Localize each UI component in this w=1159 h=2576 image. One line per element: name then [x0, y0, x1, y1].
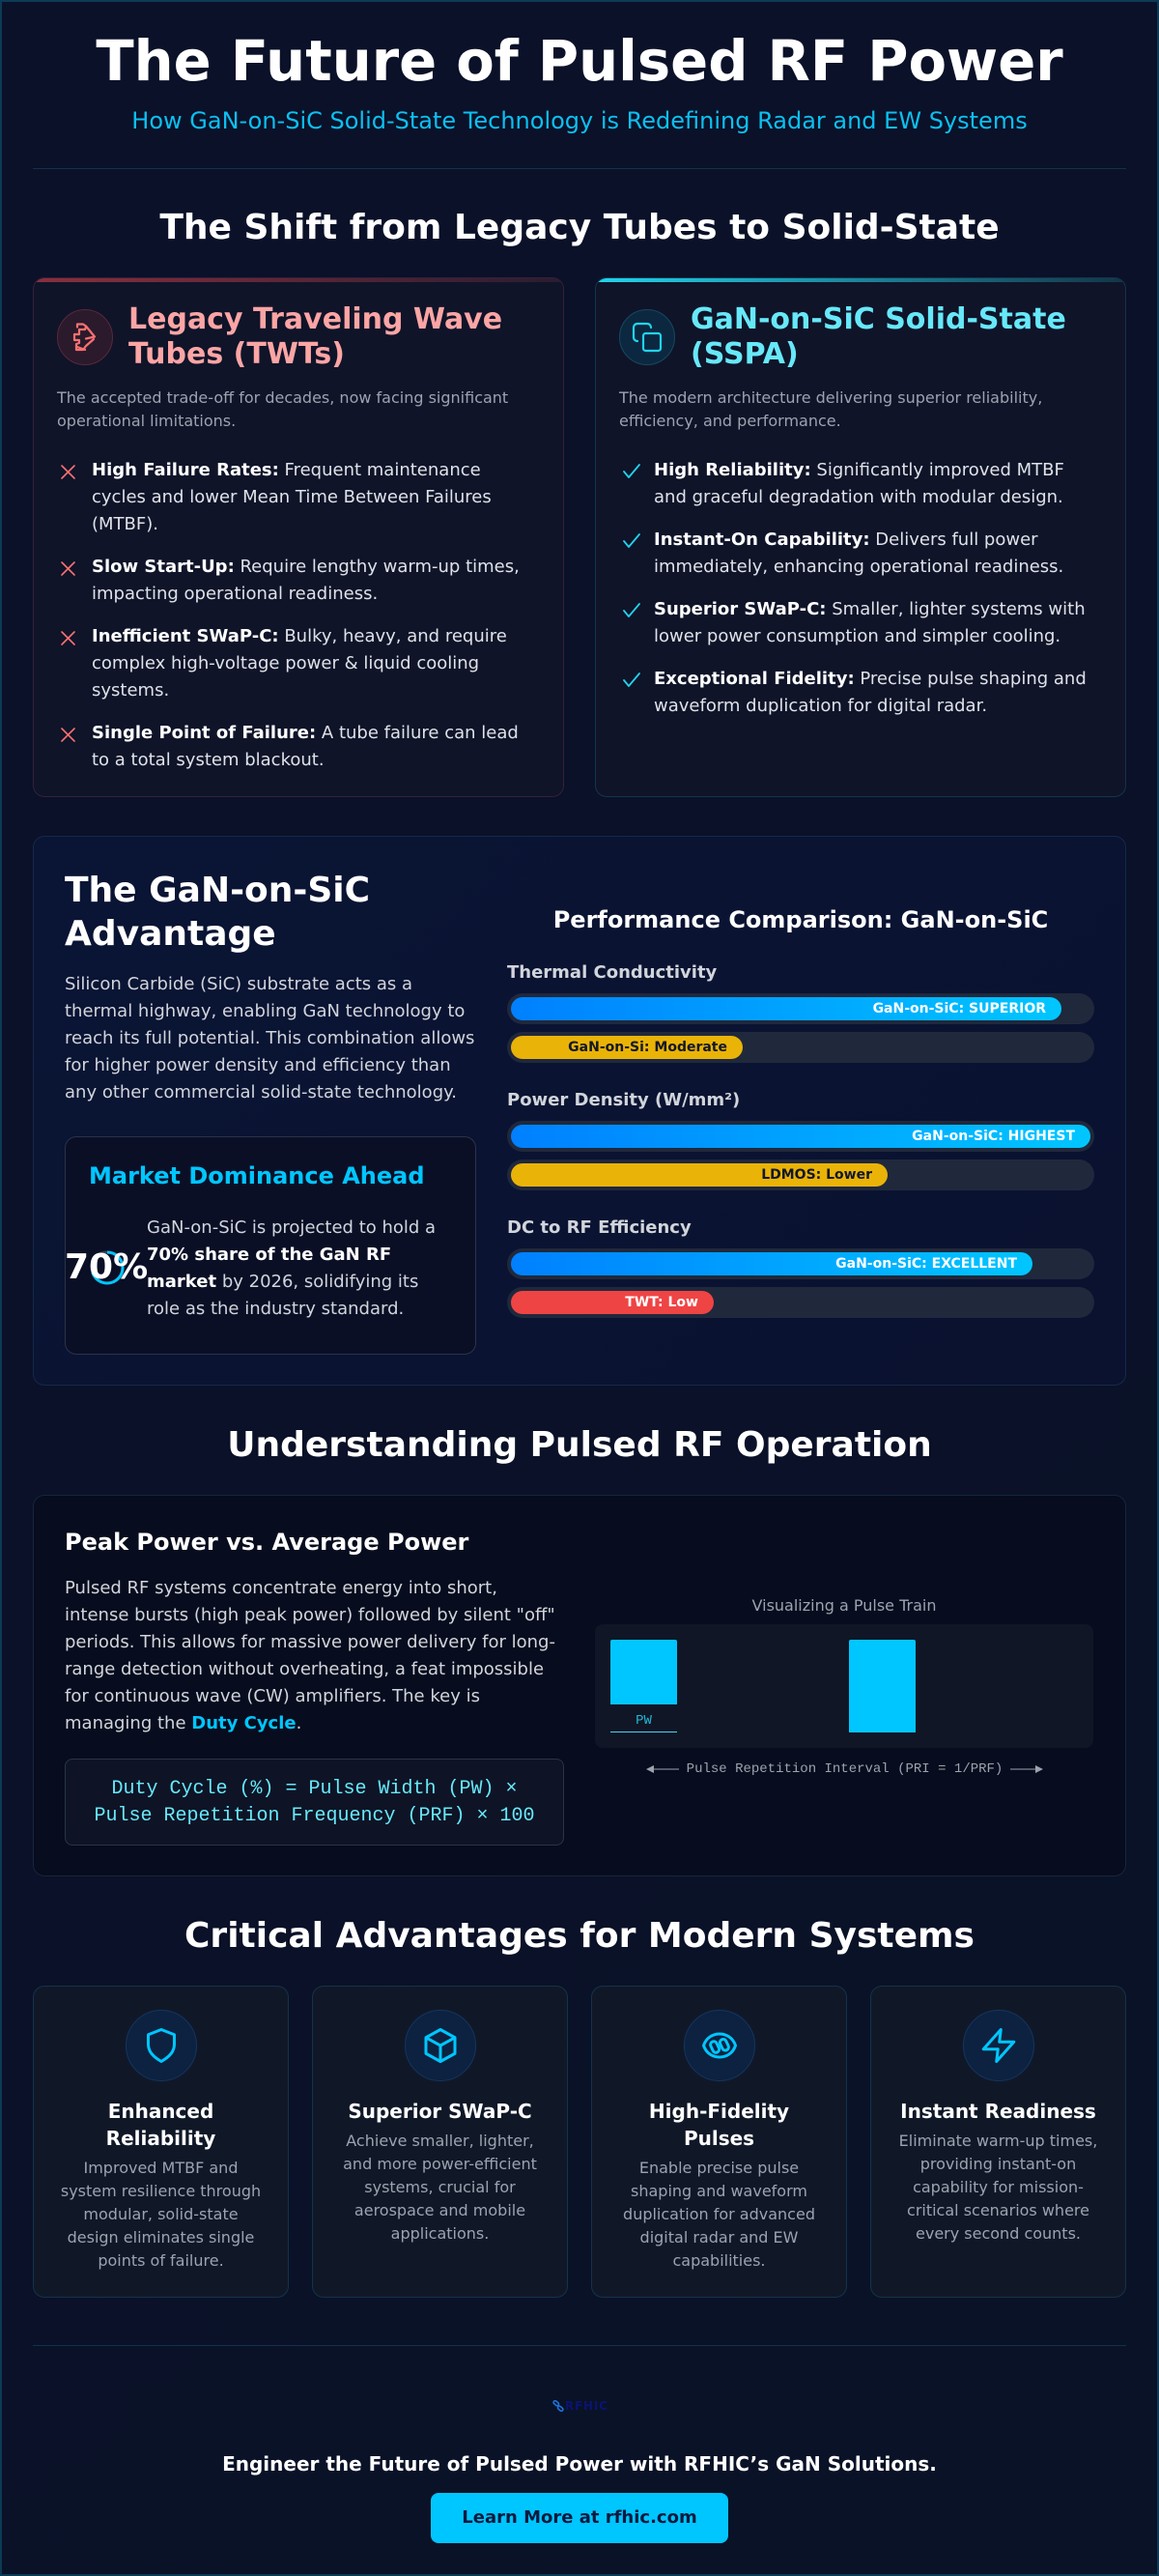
list item: SWaP-C: lower power consumption and simpler cooling.	[654, 626, 1060, 646]
text: peak power explanation: for continuous wave (CW) amplifiers. The key is	[65, 1686, 480, 1706]
text: market share: GaN-on-SiC is projected to hold a 70% share of the GaN RF market by 2026, solidifying its role as the industry standard.	[147, 1217, 436, 1319]
subtitle: How GaN-on-SiC Solid-State Technology is Redefining Radar and EW Systems	[131, 107, 1028, 134]
description: SSPA: The modern architecture delivering superior reliability, efficiency, and performance.	[619, 388, 1042, 430]
text: peak power explanation: range detection without overheating, a feat impossible	[65, 1659, 544, 1679]
bar: GaN-on-Si moderate	[507, 1032, 1094, 1063]
heading: understanding: Understanding Pulsed RF Operation	[227, 1425, 932, 1465]
icon: legacy tube	[57, 309, 113, 365]
list item: single point of failure	[92, 723, 519, 770]
list item: fidelity: waveform duplication for digital radar.	[654, 696, 987, 716]
panel: legacy TWTs	[33, 277, 564, 797]
panel: pulsed RF	[33, 1495, 1126, 1876]
list item: slow start-up: Slow Start-Up: Require lengthy warm-up times, impacting operational readiness.	[92, 557, 520, 604]
icon: cross	[61, 728, 75, 742]
caption: pulse train: Visualizing a Pulse Train	[752, 1596, 936, 1615]
bar: TWT low	[507, 1287, 1094, 1318]
icon: check	[623, 673, 640, 687]
icon: check	[623, 533, 640, 548]
text: call to action: Engineer the Future of Pulsed Power with RFHIC’s GaN Solutions.	[222, 2452, 937, 2476]
heading: Enhanced Reliability	[106, 2100, 215, 2150]
list item: SWaP-C	[654, 599, 1086, 646]
text: peak power explanation	[65, 1578, 555, 1733]
list item: single point of failure: to a total system blackout.	[92, 750, 325, 770]
chart label: power density: Power Density (W/mm²)	[507, 1090, 740, 1110]
icon: cube	[405, 2010, 476, 2081]
logo: RFHIC: RFHIC	[565, 2399, 608, 2413]
heading: legacy: Legacy Traveling Wave Tubes (TWTs)	[128, 302, 502, 371]
heading: Instant Readiness	[900, 2100, 1096, 2123]
list item: failure rates: High Failure Rates: Frequent maintenance cycles and lower Mean Time Between Failures (MTBF).	[92, 460, 492, 534]
panel: market dominance	[65, 1136, 476, 1355]
icon: lightning	[963, 2010, 1034, 2081]
icon: cross	[61, 561, 75, 576]
formula box: Duty Cycle (%) = Pulse Width (PW) ×	[111, 1778, 518, 1800]
bar: TWT low: TWT: Low	[625, 1295, 698, 1310]
card: SWaP-C	[312, 1986, 568, 2298]
heading: Superior SWaP-C	[348, 2100, 532, 2123]
icon: shield	[126, 2010, 197, 2081]
card: fidelity	[591, 1986, 847, 2298]
formula box: Pulse Repetition Frequency (PRF) × 100	[94, 1805, 535, 1827]
text: Achieve smaller, lighter, and more power-efficient systems, crucial for aerospace and mobile applications.	[343, 2132, 537, 2243]
list item: instant-on: immediately, enhancing operational readiness.	[654, 557, 1063, 577]
list item: SWaP-C: systems.	[92, 680, 169, 701]
bar: GaN-on-SiC highest: GaN-on-SiC: HIGHEST	[912, 1129, 1075, 1144]
text: Eliminate warm-up times, providing instant-on capability for mission-critical scenarios where every second counts.	[899, 2132, 1097, 2243]
heading: performance comparison: Performance Comparison: GaN-on-SiC	[553, 906, 1048, 933]
list item: SWaP-C: Inefficient SWaP-C: Bulky, heavy, and require	[92, 626, 507, 646]
pulse 2	[849, 1640, 916, 1732]
pulse 1	[610, 1640, 677, 1704]
formula box	[65, 1759, 564, 1846]
bar: GaN-on-SiC superior: GaN-on-SiC: SUPERIOR	[873, 1001, 1046, 1016]
list item: reliability: and graceful degradation with modular design.	[654, 487, 1063, 507]
list item: fidelity	[654, 669, 1087, 716]
label: PW: PW	[636, 1713, 652, 1729]
icon: cross	[61, 631, 75, 645]
text: SiC explanation: Silicon Carbide (SiC) substrate acts as a thermal highway, enabling GaN technology to reach its full potential. This combination allows for higher power density and efficiency than any other commercial solid-state technology.	[65, 974, 474, 1102]
text: Improved MTBF and system resilience through modular, solid-state design eliminates single points of failure.	[61, 2159, 261, 2270]
list item: SWaP-C: complex high-voltage power & liquid cooling	[92, 653, 479, 673]
icon: copy chips	[619, 309, 675, 365]
heading: SSPA: GaN-on-SiC Solid-State (SSPA)	[691, 302, 1066, 371]
list item: SWaP-C	[92, 626, 507, 701]
bar: GaN-on-SiC highest	[507, 1121, 1094, 1152]
icon: waveform eye	[684, 2010, 755, 2081]
list item: fidelity: Exceptional Fidelity: Precise pulse shaping and	[654, 669, 1087, 689]
heading: advantage: The GaN-on-SiC Advantage	[65, 871, 370, 954]
bar: LDMOS lower	[507, 1159, 1094, 1190]
donut ring	[91, 1250, 124, 1285]
icon: cross	[61, 465, 75, 479]
list item: reliability	[654, 460, 1064, 507]
caption: pulse repetition interval: Pulse Repetition Interval (PRI = 1/PRF)	[687, 1761, 1003, 1777]
text: peak power explanation: managing the Duty Cycle.	[65, 1713, 301, 1733]
card: readiness	[870, 1986, 1126, 2298]
icon: check	[623, 464, 640, 478]
text: peak power explanation: intense bursts (high peak power) followed by silent "off"	[65, 1605, 555, 1625]
list item: single point of failure: Single Point of Failure: A tube failure can lead	[92, 723, 519, 743]
heading: the shift: The Shift from Legacy Tubes to Solid-State	[159, 208, 1000, 247]
card: reliability	[33, 1986, 289, 2298]
button: learn more	[431, 2493, 728, 2543]
heading: market: Market Dominance Ahead	[89, 1162, 425, 1189]
text: Enable precise pulse shaping and waveform duplication for advanced digital radar and EW capabilities.	[623, 2159, 815, 2270]
bar: LDMOS lower: LDMOS: Lower	[761, 1167, 872, 1183]
chart: pulse train	[595, 1624, 1093, 1748]
bar: GaN-on-SiC excellent	[507, 1248, 1094, 1279]
label: PW	[610, 1712, 677, 1732]
stat: 70%: 70%	[65, 1247, 148, 1287]
panel: GaN-on-SiC SSPA	[595, 277, 1126, 797]
heading: High-Fidelity Pulses	[649, 2100, 789, 2150]
list item: SWaP-C: Superior SWaP-C: Smaller, lighter systems with	[654, 599, 1086, 619]
title: The Future of Pulsed RF Power	[96, 29, 1063, 94]
icon: check	[623, 603, 640, 617]
bar: GaN-on-SiC superior	[507, 993, 1094, 1024]
heading: peak vs average: Peak Power vs. Average Power	[65, 1529, 468, 1556]
list item: instant-on	[654, 530, 1063, 577]
description: legacy: The accepted trade-off for decades, now facing significant operational limitations.	[57, 388, 508, 430]
bar: GaN-on-SiC excellent: GaN-on-SiC: EXCELLENT	[835, 1256, 1017, 1272]
heading: critical advantages: Critical Advantages for Modern Systems	[184, 1916, 975, 1956]
bar: GaN-on-Si moderate: GaN-on-Si: Moderate	[568, 1040, 727, 1055]
list item: instant-on: Instant-On Capability: Delivers full power	[654, 530, 1038, 550]
list item: reliability: High Reliability: Significantly improved MTBF	[654, 460, 1064, 480]
chart label: DC to RF efficiency: DC to RF Efficiency	[507, 1217, 692, 1238]
panel: advantage	[33, 836, 1126, 1386]
chart label: thermal conductivity: Thermal Conductivity	[507, 962, 717, 983]
text: peak power explanation: periods. This allows for massive power delivery for long-	[65, 1632, 555, 1652]
button: learn more: Learn More at rfhic.com	[462, 2507, 697, 2528]
text: peak power explanation: Pulsed RF systems concentrate energy into short,	[65, 1578, 497, 1598]
